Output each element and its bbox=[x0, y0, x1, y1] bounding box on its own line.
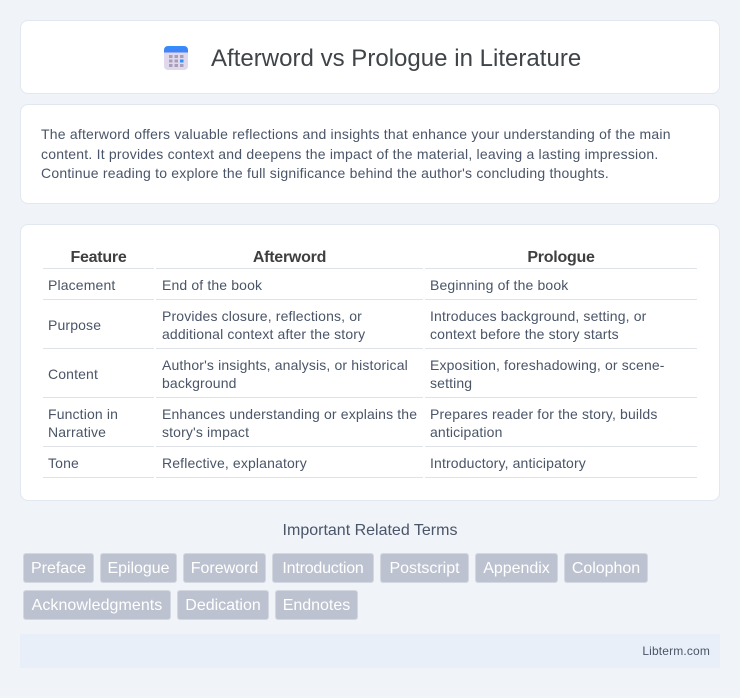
row: Content: Content bbox=[48, 366, 98, 382]
tag list: related terms bbox=[23, 553, 648, 620]
row: Purpose: Purpose bbox=[48, 317, 101, 333]
footer bar bbox=[20, 634, 720, 668]
row: Content: Author's insights, analysis, or historical bbox=[162, 357, 408, 373]
row: Purpose bbox=[48, 308, 646, 342]
column heading: Prologue: Prologue bbox=[527, 249, 595, 266]
tag: Dedication bbox=[177, 590, 269, 620]
tag: Endnotes: Endnotes bbox=[283, 597, 350, 614]
row: Tone bbox=[48, 455, 586, 471]
paragraph bbox=[41, 126, 671, 181]
tag: Colophon: Colophon bbox=[572, 560, 640, 577]
tag: Postscript bbox=[380, 553, 469, 583]
tag: Epilogue bbox=[100, 553, 177, 583]
tag: Endnotes bbox=[275, 590, 358, 620]
row: Placement: Placement bbox=[48, 277, 115, 293]
row: Function in Narrative: Narrative bbox=[48, 424, 106, 440]
row: Content: background bbox=[162, 375, 237, 391]
row: Function in Narrative: anticipation bbox=[430, 424, 503, 440]
tag: Preface: Preface bbox=[31, 560, 86, 577]
row: Purpose: context before the story starts bbox=[430, 326, 619, 342]
row: Content: setting bbox=[430, 375, 472, 391]
panel: header bbox=[20, 20, 720, 94]
tag: Acknowledgments bbox=[23, 590, 171, 620]
row: Function in Narrative: Function in bbox=[48, 406, 118, 422]
row: Function in Narrative: Prepares reader for the story, builds bbox=[430, 406, 657, 422]
row: Purpose: additional context after the story bbox=[162, 326, 365, 342]
title: Afterword vs Prologue in Literature bbox=[211, 45, 581, 72]
panel: introduction text bbox=[20, 104, 720, 204]
row: Content: Exposition, foreshadowing, or scene- bbox=[430, 357, 665, 373]
paragraph: content. It provides context and deepens the impact of the material, leaving a lasting impression. bbox=[41, 146, 658, 162]
footer credit: Libterm.com bbox=[642, 644, 710, 658]
tag: Foreword bbox=[183, 553, 266, 583]
column heading: Afterword: Afterword bbox=[253, 249, 326, 266]
row: Function in Narrative bbox=[48, 406, 657, 440]
section heading: related terms: Important Related Terms bbox=[283, 522, 457, 539]
tag: Introduction bbox=[272, 553, 374, 583]
tag: Preface bbox=[23, 553, 94, 583]
tag: Postscript: Postscript bbox=[389, 560, 460, 577]
row: Tone: Tone bbox=[48, 455, 79, 471]
row: Content bbox=[48, 357, 665, 391]
column heading: Feature: Feature bbox=[70, 249, 127, 266]
tag: Appendix bbox=[475, 553, 558, 583]
tag: Colophon bbox=[564, 553, 648, 583]
tag: Dedication: Dedication bbox=[185, 597, 261, 614]
panel: comparison table bbox=[20, 224, 720, 501]
row: Tone: Reflective, explanatory bbox=[162, 455, 307, 471]
tag: Introduction: Introduction bbox=[282, 560, 364, 577]
row: Function in Narrative: Enhances understanding or explains the bbox=[162, 406, 417, 422]
row: Purpose: Introduces background, setting, or bbox=[430, 308, 646, 324]
row: Function in Narrative: story's impact bbox=[162, 424, 249, 440]
row: Placement: End of the book bbox=[162, 277, 262, 293]
row: Purpose: Provides closure, reflections, or bbox=[162, 308, 362, 324]
tag: Foreword: Foreword bbox=[191, 560, 258, 577]
row: Tone: Introductory, anticipatory bbox=[430, 455, 586, 471]
row: Placement: Beginning of the book bbox=[430, 277, 568, 293]
paragraph: The afterword offers valuable reflections and insights that enhance your understanding of the main bbox=[41, 126, 671, 142]
tag: Acknowledgments: Acknowledgments bbox=[32, 597, 162, 614]
row: Placement bbox=[48, 277, 568, 293]
icon: calendar bbox=[164, 46, 188, 70]
tag: Epilogue: Epilogue bbox=[107, 560, 170, 577]
paragraph: Continue reading to explore the full significance behind the author's concluding thoughts. bbox=[41, 165, 609, 181]
tag: Appendix: Appendix bbox=[483, 560, 550, 577]
